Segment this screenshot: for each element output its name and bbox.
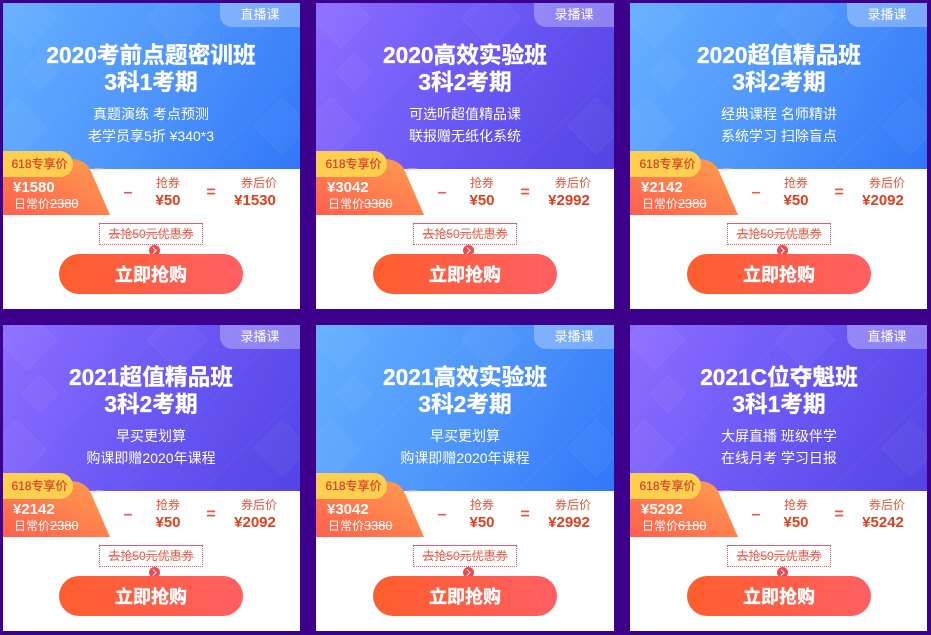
button: 立即抢购 bbox=[115, 265, 187, 285]
heading: 3科2考期 bbox=[418, 69, 512, 95]
ribbon: price background bbox=[3, 159, 110, 215]
tag: 录播课 bbox=[534, 3, 614, 27]
badge: 618专享价: 618专享价 bbox=[639, 157, 696, 171]
button: 立即抢购 bbox=[743, 587, 815, 607]
button bbox=[687, 576, 871, 616]
badge: 618专享价: 618专享价 bbox=[11, 157, 68, 171]
heading: 2020高效实验班 bbox=[383, 42, 547, 68]
heading bbox=[697, 42, 861, 95]
coupon link: 去抢50元优惠券 bbox=[108, 227, 194, 241]
promo price: ¥5292 bbox=[641, 501, 683, 518]
button: 立即抢购 bbox=[429, 587, 501, 607]
text block: selling points: 经典课程 名师精讲 bbox=[721, 106, 837, 122]
badge: 618专享价: 618专享价 bbox=[11, 479, 68, 493]
coupon link: 去抢50元优惠券 bbox=[422, 549, 508, 563]
final price value: ¥1530 bbox=[234, 192, 276, 209]
ribbon: price background bbox=[316, 481, 424, 537]
heading: 3科1考期 bbox=[104, 69, 198, 95]
text block: selling points: 早买更划算 bbox=[430, 428, 500, 444]
badge: 618专享价 bbox=[316, 151, 387, 177]
coupon label: 抢券 bbox=[156, 498, 180, 512]
equals sign: = bbox=[834, 184, 844, 201]
coupon link bbox=[727, 223, 831, 245]
promo price: ¥3042 bbox=[327, 501, 369, 518]
tag: 录播课 bbox=[847, 3, 927, 27]
equals sign: = bbox=[206, 184, 216, 201]
regular price: 日常价6180 bbox=[642, 518, 706, 533]
text block: selling points: 大屏直播 班级伴学 bbox=[721, 428, 837, 444]
minus sign: – bbox=[438, 184, 446, 201]
heading: 3科2考期 bbox=[104, 391, 198, 417]
icon: chevron dot bbox=[148, 566, 160, 578]
final price label: 券后价 bbox=[241, 498, 277, 512]
coupon label: 抢券 bbox=[156, 176, 180, 190]
coupon value: ¥50 bbox=[155, 192, 181, 209]
coupon value: ¥50 bbox=[783, 514, 809, 531]
text block: selling points bbox=[721, 428, 837, 466]
tag: 直播课 bbox=[847, 325, 927, 349]
button: 立即抢购 bbox=[743, 265, 815, 285]
equals sign: = bbox=[520, 506, 530, 523]
final price label: 券后价 bbox=[869, 176, 905, 190]
icon: chevron dot bbox=[462, 244, 474, 256]
promo price: ¥1580 bbox=[13, 179, 55, 196]
regular price: 日常价2380 bbox=[14, 518, 78, 533]
panel: 2021C位夺魁班 bbox=[630, 325, 928, 631]
button bbox=[687, 254, 871, 294]
icon: chevron dot bbox=[148, 244, 160, 256]
coupon link bbox=[99, 223, 203, 245]
tag: 直播课: 直播课 bbox=[867, 329, 906, 344]
heading: 3科2考期 bbox=[418, 391, 512, 417]
heading: 2021C位夺魁班 bbox=[700, 364, 858, 390]
text block: selling points: 联报赠无纸化系统 bbox=[409, 128, 521, 144]
button bbox=[373, 576, 557, 616]
text block: selling points bbox=[409, 106, 521, 144]
coupon link: 去抢50元优惠券 bbox=[736, 549, 822, 563]
panel: 2021高效实验班 bbox=[316, 325, 614, 631]
tag: 录播课 bbox=[220, 325, 300, 349]
tag: 录播课: 录播课 bbox=[240, 329, 280, 344]
coupon value: ¥50 bbox=[469, 192, 495, 209]
final price value: ¥5242 bbox=[862, 514, 904, 531]
badge: 618专享价: 618专享价 bbox=[325, 157, 382, 171]
text block: selling points: 早买更划算 bbox=[116, 428, 186, 444]
heading: 2021超值精品班 bbox=[69, 364, 233, 390]
heading bbox=[383, 364, 547, 417]
coupon value: ¥50 bbox=[469, 514, 495, 531]
icon: chevron dot bbox=[776, 566, 788, 578]
minus sign: – bbox=[752, 184, 760, 201]
text block: selling points: 购课即赠2020年课程 bbox=[86, 450, 216, 466]
text block: selling points: 在线月考 学习日报 bbox=[721, 450, 837, 466]
final price label: 券后价 bbox=[555, 176, 591, 190]
button bbox=[59, 254, 243, 294]
tag: 直播课 bbox=[220, 3, 300, 27]
badge: 618专享价: 618专享价 bbox=[325, 479, 382, 493]
text block: selling points: 购课即赠2020年课程 bbox=[400, 450, 530, 466]
coupon label: 抢券 bbox=[784, 498, 808, 512]
heading bbox=[46, 42, 256, 95]
minus sign: – bbox=[124, 184, 132, 201]
regular price: 日常价3380 bbox=[328, 196, 392, 211]
coupon link bbox=[413, 223, 517, 245]
ribbon: price background bbox=[316, 159, 424, 215]
equals sign: = bbox=[520, 184, 530, 201]
badge: 618专享价: 618专享价 bbox=[639, 479, 696, 493]
text block: selling points: 老学员享5折 ¥340*3 bbox=[88, 128, 214, 144]
final price value: ¥2092 bbox=[234, 514, 276, 531]
final price label: 券后价 bbox=[555, 498, 591, 512]
promo price: ¥2142 bbox=[641, 179, 683, 196]
badge: 618专享价 bbox=[630, 151, 701, 177]
heading bbox=[69, 364, 233, 417]
promo price: ¥2142 bbox=[13, 501, 55, 518]
panel: 2020超值精品班 bbox=[630, 3, 928, 309]
final price value: ¥2992 bbox=[548, 514, 590, 531]
button: 立即抢购 bbox=[429, 265, 501, 285]
minus sign: – bbox=[752, 506, 760, 523]
heading: 3科1考期 bbox=[732, 391, 826, 417]
heading: 2020超值精品班 bbox=[697, 42, 861, 68]
final price value: ¥2092 bbox=[862, 192, 904, 209]
coupon label: 抢券 bbox=[784, 176, 808, 190]
panel: 2021超值精品班 bbox=[2, 325, 300, 631]
tag: 直播课: 直播课 bbox=[240, 7, 280, 22]
button: 立即抢购 bbox=[115, 587, 187, 607]
icon: chevron dot bbox=[776, 244, 788, 256]
text block: selling points bbox=[400, 428, 530, 466]
ribbon: price background bbox=[630, 159, 738, 215]
equals sign: = bbox=[834, 506, 844, 523]
coupon link bbox=[727, 545, 831, 567]
text block: selling points bbox=[88, 106, 214, 144]
panel: 2020考前点题密训班 bbox=[2, 3, 300, 309]
badge: 618专享价 bbox=[316, 473, 387, 499]
coupon link bbox=[99, 545, 203, 567]
ribbon: price background bbox=[630, 481, 738, 537]
ribbon: price background bbox=[3, 481, 110, 537]
badge: 618专享价 bbox=[2, 473, 73, 499]
regular price: 日常价2380 bbox=[642, 196, 706, 211]
heading: 3科2考期 bbox=[732, 69, 826, 95]
regular price: 日常价2380 bbox=[14, 196, 78, 211]
button bbox=[373, 254, 557, 294]
tag: 录播课: 录播课 bbox=[554, 7, 594, 22]
text block: selling points: 系统学习 扫除盲点 bbox=[721, 128, 837, 144]
text block: selling points: 可选听超值精品课 bbox=[409, 106, 521, 122]
tag: 录播课: 录播课 bbox=[867, 7, 906, 22]
final price label: 券后价 bbox=[241, 176, 277, 190]
heading bbox=[700, 364, 858, 417]
coupon value: ¥50 bbox=[155, 514, 181, 531]
final price label: 券后价 bbox=[869, 498, 905, 512]
button bbox=[59, 576, 243, 616]
coupon link: 去抢50元优惠券 bbox=[422, 227, 508, 241]
promo price: ¥3042 bbox=[327, 179, 369, 196]
text block: selling points bbox=[86, 428, 216, 466]
badge: 618专享价 bbox=[630, 473, 701, 499]
regular price: 日常价3380 bbox=[328, 518, 392, 533]
minus sign: – bbox=[124, 506, 132, 523]
icon: chevron dot bbox=[462, 566, 474, 578]
minus sign: – bbox=[438, 506, 446, 523]
coupon link: 去抢50元优惠券 bbox=[736, 227, 822, 241]
tag: 录播课: 录播课 bbox=[554, 329, 594, 344]
coupon link bbox=[413, 545, 517, 567]
coupon link: 去抢50元优惠券 bbox=[108, 549, 194, 563]
heading bbox=[383, 42, 547, 95]
badge: 618专享价 bbox=[2, 151, 73, 177]
text block: selling points: 真题演练 考点预测 bbox=[93, 106, 209, 122]
text block: selling points bbox=[721, 106, 837, 144]
equals sign: = bbox=[206, 506, 216, 523]
final price value: ¥2992 bbox=[548, 192, 590, 209]
heading: 2020考前点题密训班 bbox=[46, 42, 256, 68]
coupon label: 抢券 bbox=[470, 176, 494, 190]
coupon label: 抢券 bbox=[470, 498, 494, 512]
heading: 2021高效实验班 bbox=[383, 364, 547, 390]
tag: 录播课 bbox=[534, 325, 614, 349]
coupon value: ¥50 bbox=[783, 192, 809, 209]
panel: 2020高效实验班 bbox=[316, 3, 614, 309]
